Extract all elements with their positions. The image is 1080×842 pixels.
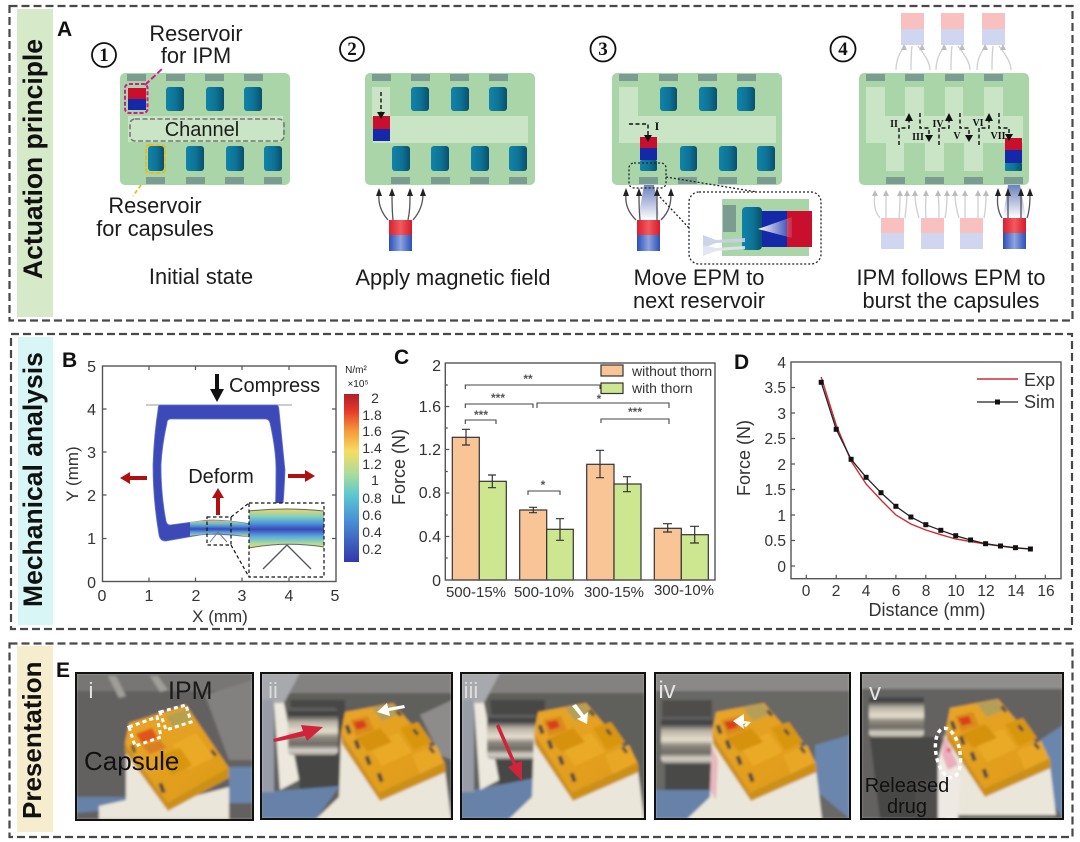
axes and ticks: 14 bbox=[1007, 583, 1025, 600]
axes and ticks bbox=[63, 359, 340, 626]
panel: mechanical analysis bbox=[11, 334, 1072, 629]
step number 1: 1 bbox=[99, 45, 109, 66]
label: released drug bbox=[865, 775, 949, 818]
photo i: IPM bbox=[168, 677, 212, 705]
IPM path arrows II to VII: V bbox=[953, 131, 961, 142]
photo v bbox=[861, 673, 1063, 820]
axes and ticks: 10 bbox=[947, 583, 965, 600]
photo i bbox=[76, 673, 253, 820]
axes and ticks: 2 bbox=[192, 588, 201, 605]
color bar: 1.8 bbox=[362, 407, 382, 423]
microfluidic board 1 bbox=[120, 73, 290, 185]
color bar: 1 bbox=[371, 472, 379, 488]
legend: Exp bbox=[1024, 370, 1055, 390]
color bar: N/m² bbox=[345, 365, 367, 376]
microfluidic board 2 bbox=[365, 73, 535, 185]
IPM path arrows II to VII: VII bbox=[990, 131, 1006, 142]
external magnet with field arrows bbox=[623, 185, 674, 251]
axes and ticks: 0 bbox=[98, 588, 107, 605]
panel letter C: C bbox=[394, 346, 409, 369]
color bar: 0.4 bbox=[362, 524, 382, 540]
color bar: 1.6 bbox=[362, 423, 382, 439]
legend: Sim bbox=[1024, 392, 1055, 412]
sidebar: presentation: Presentation bbox=[17, 662, 47, 819]
caption: IPM follows EPM: burst the capsules bbox=[863, 288, 1040, 313]
color bar: 1.4 bbox=[362, 440, 382, 456]
error bars bbox=[462, 429, 699, 543]
chart B: stress simulation bbox=[63, 359, 382, 626]
significance brackets: * bbox=[541, 478, 546, 492]
axes and ticks: 3 bbox=[777, 406, 786, 423]
label: released drug: drug bbox=[887, 796, 927, 818]
microfluidic board 3: I bbox=[655, 119, 660, 133]
step 2: apply magnetic field bbox=[340, 37, 551, 290]
step number 3: 3 bbox=[598, 39, 608, 60]
legend bbox=[601, 363, 712, 396]
axes and ticks: 1 bbox=[777, 508, 786, 525]
arrow bbox=[733, 714, 751, 729]
axes and ticks: 8 bbox=[922, 583, 930, 600]
sidebar: actuation principle: Actuation principle bbox=[18, 39, 48, 279]
significance brackets: ** bbox=[523, 372, 533, 386]
photo ii bbox=[261, 673, 452, 819]
deform arrows and label bbox=[120, 466, 315, 515]
axes and ticks: 3 bbox=[87, 445, 96, 462]
axes and ticks bbox=[734, 355, 1061, 620]
step 1: initial state bbox=[92, 21, 290, 289]
axes and ticks: 0 bbox=[802, 583, 811, 600]
caption: move EPM bbox=[633, 265, 765, 313]
callout: reservoir for IPM: for IPM bbox=[161, 43, 231, 68]
deform arrows and label: Deform bbox=[188, 466, 254, 488]
significance brackets: *** bbox=[474, 408, 488, 422]
dotted ellipse: released drug bbox=[932, 726, 964, 780]
bars bbox=[452, 437, 708, 580]
axes and ticks: X (mm) bbox=[192, 607, 248, 626]
step number 3 bbox=[590, 36, 616, 62]
axes and ticks: 500-10% bbox=[514, 584, 574, 601]
axes and ticks: 6 bbox=[892, 583, 900, 600]
axes and ticks: 5 bbox=[331, 588, 340, 605]
compress arrow and label bbox=[210, 374, 320, 402]
axes and ticks: 1 bbox=[145, 588, 154, 605]
callout: reservoir for IPM: Reservoir bbox=[149, 21, 243, 46]
curve: Sim bbox=[819, 380, 1033, 552]
step number 4 bbox=[830, 36, 856, 62]
panel letter D: D bbox=[734, 351, 749, 374]
step 4: IPM follows EPM bbox=[830, 13, 1045, 313]
panel: actuation principle bbox=[10, 6, 1072, 320]
IPM path arrows II to VII bbox=[890, 113, 1013, 145]
external magnet with field arrows bbox=[376, 188, 426, 251]
photo iv: iv bbox=[658, 677, 676, 704]
legend: without thorn bbox=[631, 363, 712, 379]
axes and ticks: 1.6 bbox=[419, 399, 441, 416]
axes and ticks: 2 bbox=[87, 488, 96, 505]
sidebar: mechanical analysis: Mechanical analysis bbox=[18, 352, 48, 607]
legend: with thorn bbox=[631, 380, 693, 396]
color bar: 0.8 bbox=[362, 490, 382, 506]
step number 1 bbox=[92, 43, 116, 67]
caption: IPM follows EPM: IPM follows EPM to bbox=[857, 265, 1045, 290]
microfluidic board 3 bbox=[612, 73, 782, 185]
color bar bbox=[344, 365, 382, 562]
legend bbox=[977, 370, 1055, 412]
photo v: v bbox=[869, 679, 881, 706]
callout: channel bbox=[130, 119, 284, 141]
sidebar: actuation principle bbox=[17, 9, 53, 317]
caption: IPM follows EPM bbox=[857, 265, 1045, 313]
significance brackets bbox=[465, 372, 669, 495]
dotted IPM and capsule marks bbox=[129, 705, 191, 746]
callout: reservoir for capsules: Reservoir bbox=[108, 193, 202, 218]
panel: presentation bbox=[10, 644, 1072, 837]
photo i: Capsule bbox=[84, 746, 179, 776]
axes and ticks: Force (N) bbox=[389, 429, 409, 505]
step number 4: 4 bbox=[838, 39, 848, 60]
significance brackets: *** bbox=[628, 405, 642, 419]
axes and ticks: 1.2 bbox=[419, 442, 441, 459]
axes and ticks: 2 bbox=[832, 583, 840, 600]
photo ii: ii bbox=[268, 678, 278, 703]
axes and ticks: 4 bbox=[87, 402, 96, 419]
color bar: ×10⁵ bbox=[347, 379, 369, 390]
callout: reservoir for IPM bbox=[125, 21, 243, 113]
axes and ticks: 0 bbox=[87, 575, 96, 592]
photo iii bbox=[461, 673, 645, 819]
axes and ticks: 0.5 bbox=[764, 533, 786, 550]
axes and ticks: 2 bbox=[432, 358, 441, 375]
axes and ticks: 3 bbox=[238, 588, 247, 605]
axes and ticks: 0.4 bbox=[419, 529, 441, 546]
callout: reservoir for capsules: for capsules bbox=[96, 216, 214, 241]
step number 2: 2 bbox=[347, 39, 357, 60]
panel letter A: A bbox=[57, 18, 72, 41]
photo iii: iii bbox=[464, 678, 478, 703]
color bar: 0.6 bbox=[362, 507, 382, 523]
axes and ticks bbox=[389, 358, 715, 601]
axes and ticks: 300-15% bbox=[584, 584, 644, 601]
axes and ticks: Force (N) bbox=[734, 420, 754, 496]
axes and ticks: 2 bbox=[777, 457, 786, 474]
axes and ticks: 4 bbox=[777, 355, 786, 372]
axes and ticks: 2.5 bbox=[764, 431, 786, 448]
IPM path arrows II to VII: II bbox=[890, 119, 898, 130]
label: released drug: Released bbox=[865, 775, 949, 797]
axes and ticks: 0 bbox=[432, 573, 441, 590]
magnified inset of reservoir bbox=[629, 163, 821, 264]
axes and ticks: 4 bbox=[862, 583, 871, 600]
significance brackets: * bbox=[597, 392, 602, 406]
deformed chamber bbox=[146, 405, 292, 542]
axes and ticks: 5 bbox=[87, 359, 96, 376]
axes and ticks: 300-10% bbox=[654, 582, 714, 599]
axes and ticks: 12 bbox=[977, 583, 995, 600]
color bar: 1.2 bbox=[362, 456, 382, 472]
active external magnet with field arrows bbox=[995, 185, 1033, 249]
caption: apply magnetic field: Apply magnetic field bbox=[355, 265, 551, 290]
compress arrow and label: Compress bbox=[229, 375, 320, 397]
magnified inset bbox=[207, 503, 324, 577]
axes and ticks: Y (mm) bbox=[63, 446, 82, 502]
axes and ticks: 4 bbox=[285, 588, 294, 605]
axes and ticks: 3.5 bbox=[764, 380, 786, 397]
axes and ticks: 0 bbox=[777, 559, 786, 576]
faded magnets below board bbox=[872, 190, 989, 249]
photo iv bbox=[655, 673, 850, 819]
photo i: i bbox=[89, 678, 93, 703]
chart C: force bar chart bbox=[389, 358, 715, 601]
IPM path arrows II to VII: IV bbox=[932, 119, 944, 130]
arrows bbox=[273, 703, 405, 742]
microfluidic board 4 bbox=[859, 73, 1029, 185]
axes and ticks: 16 bbox=[1037, 583, 1055, 600]
panel letter B: B bbox=[62, 349, 77, 372]
significance brackets: *** bbox=[491, 391, 505, 405]
callout: channel: Channel bbox=[165, 119, 239, 141]
axes and ticks: 0.8 bbox=[419, 485, 441, 502]
caption: move EPM: next reservoir bbox=[633, 288, 765, 313]
axes and ticks: 1.5 bbox=[764, 482, 786, 499]
color bar: 0.2 bbox=[362, 541, 382, 557]
IPM path arrows II to VII: VI bbox=[972, 118, 984, 129]
arrows bbox=[496, 704, 588, 781]
curve: Exp bbox=[821, 377, 1030, 549]
color bar: 2 bbox=[371, 390, 379, 406]
caption: move EPM: Move EPM to bbox=[634, 265, 764, 290]
axes and ticks: Distance (mm) bbox=[868, 600, 986, 620]
step number 2 bbox=[340, 37, 364, 61]
IPM path arrows II to VII: III bbox=[912, 132, 924, 143]
axes and ticks: 1 bbox=[87, 531, 96, 548]
step 3: move EPM to next reservoir bbox=[590, 36, 821, 313]
axes and ticks: 500-15% bbox=[446, 584, 506, 601]
callout: reservoir for capsules bbox=[96, 145, 214, 241]
panel letter E: E bbox=[56, 659, 70, 682]
caption: initial state: Initial state bbox=[149, 264, 253, 289]
faded magnets above board bbox=[896, 13, 1011, 70]
chart D: force versus distance bbox=[734, 355, 1061, 620]
